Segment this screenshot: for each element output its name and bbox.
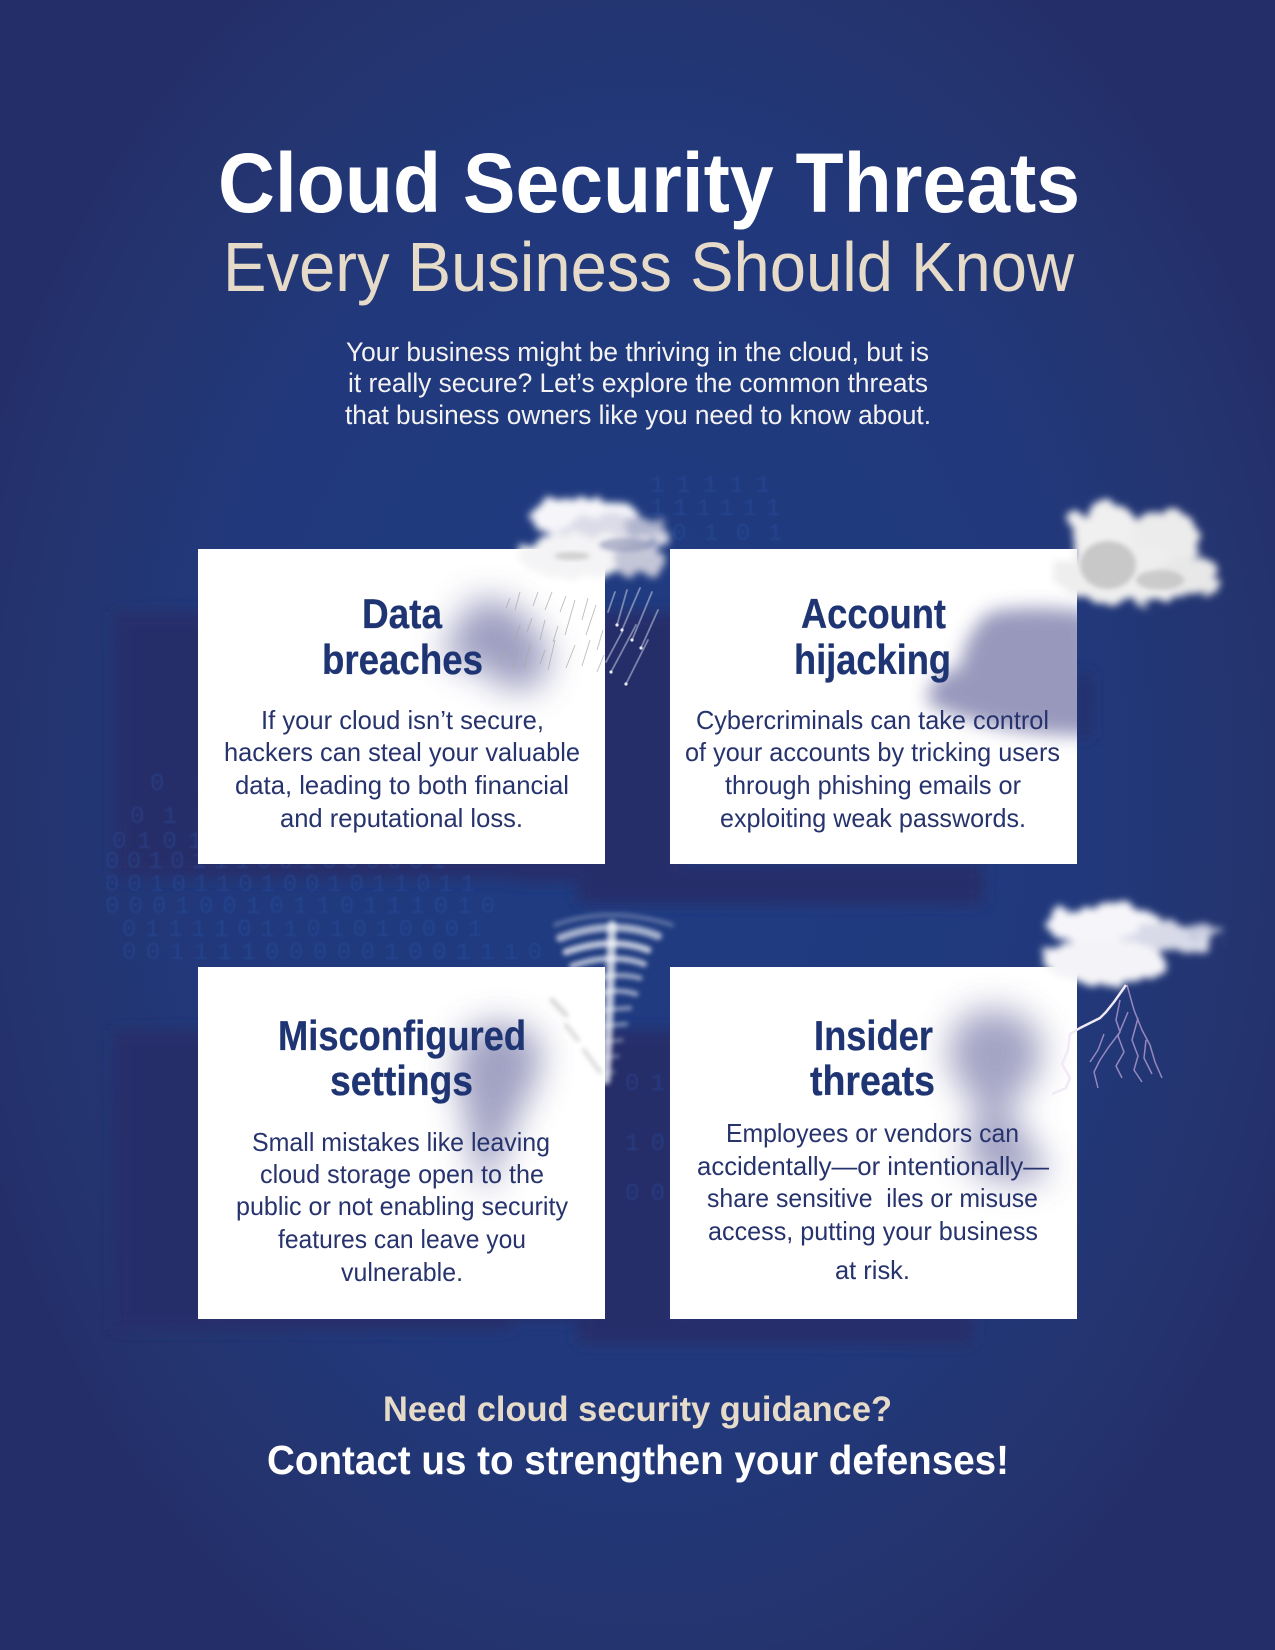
body — [685, 705, 1060, 833]
heading: Insider — [814, 1012, 933, 1059]
panel: data breaches — [198, 549, 605, 864]
binary digits background pattern: 0 1 — [625, 1071, 665, 1098]
body: at risk. — [835, 1255, 910, 1285]
intro text: that business owners like you need to know about. — [345, 400, 931, 430]
binary digits background pattern: 0 0 1 0 1 1 1 0 0 1 0 0 0 0 0 1 — [105, 849, 445, 876]
binary digits background pattern: 0 0 1 0 1 1 0 1 0 0 1 0 1 1 0 1 1 — [105, 872, 475, 899]
call to action — [267, 1390, 1009, 1483]
body: hackers can steal your valuable — [224, 737, 580, 767]
binary digits background pattern: 0 0 — [625, 1181, 665, 1208]
icon: storm cloud — [1045, 903, 1225, 984]
cloud shadow — [444, 600, 548, 689]
panel: misconfigured settings — [198, 967, 605, 1319]
body: If your cloud isn’t secure, — [261, 705, 544, 735]
heading: Data — [362, 590, 443, 637]
call to action: Need cloud security guidance? — [383, 1390, 892, 1429]
binary digits background pattern: 0 0 1 1 1 1 0 0 0 0 0 1 0 0 1 1 1 0 — [122, 940, 542, 967]
icon: grey cumulus cloud — [1053, 501, 1220, 603]
body: features can leave you — [278, 1224, 526, 1254]
body: Small mistakes like leaving — [252, 1127, 550, 1157]
icon: rain streaks on dark background — [606, 588, 658, 684]
intro text: it really secure? Let’s explore the common threats — [348, 368, 928, 398]
body: access, putting your business — [708, 1216, 1038, 1246]
binary digits background pattern: 0 0 0 1 0 0 1 0 1 1 0 1 1 1 0 1 0 — [105, 894, 495, 921]
panel: insider threats — [670, 967, 1077, 1319]
body — [224, 705, 580, 833]
body: data, leading to both financial — [235, 770, 569, 800]
binary digits background pattern: 0 1 0 1 — [672, 521, 782, 548]
binary digits background pattern: 1 0 — [625, 1131, 665, 1158]
body: exploiting weak passwords. — [720, 803, 1026, 833]
heading: Account — [801, 590, 946, 637]
body: Employees or vendors can — [726, 1118, 1019, 1148]
binary digits background pattern — [105, 473, 782, 1208]
intro text — [345, 337, 931, 430]
call to action: Contact us to strengthen your defenses! — [267, 1437, 1009, 1483]
body: through phishing emails or — [725, 770, 1021, 800]
panel: insider threats: threats — [810, 1057, 935, 1104]
rain on card — [500, 592, 604, 672]
body: accidentally—or intentionally— — [697, 1151, 1049, 1181]
binary digits background pattern: 0 1 — [150, 771, 210, 798]
body: vulnerable. — [341, 1257, 463, 1287]
title: Cloud Security Threats — [218, 136, 1080, 230]
panel: misconfigured settings: settings — [330, 1057, 473, 1104]
body: of your accounts by tricking users — [685, 737, 1060, 767]
subtitle: Every Business Should Know — [223, 228, 1074, 306]
heading: Misconfigured — [278, 1012, 526, 1059]
body: share sensitive iles or misuse — [707, 1183, 1038, 1213]
body: public or not enabling security — [236, 1191, 568, 1221]
body: cloud storage open to the — [260, 1159, 544, 1189]
intro text: Your business might be thriving in the cloud, but is — [346, 337, 929, 367]
binary digits background pattern: 1 1 1 1 1 1 — [650, 496, 780, 523]
binary digits background pattern: 0 1 1 — [130, 804, 210, 831]
icon: rain droplet tips — [609, 623, 643, 686]
icon: lightning bolts — [1052, 985, 1162, 1094]
body: and reputational loss. — [280, 803, 523, 833]
binary digits background pattern: 1 1 1 1 1 — [650, 473, 770, 500]
body — [697, 1118, 1049, 1285]
icon: tornado — [552, 915, 672, 1080]
body — [236, 1127, 568, 1287]
icon: rain cloud — [518, 498, 669, 577]
panel: data breaches: breaches — [322, 636, 483, 683]
panel: account hijacking — [670, 549, 1100, 864]
cloud shadow — [928, 608, 1100, 735]
binary digits background pattern: 0 1 1 1 1 0 1 1 0 1 0 1 0 0 0 1 — [122, 917, 482, 944]
storm shadow — [949, 1009, 1050, 1182]
tornado shadow — [456, 1023, 541, 1195]
body: Cybercriminals can take control — [696, 705, 1049, 735]
panel: account hijacking: hijacking — [794, 636, 951, 683]
binary digits background pattern: 0 1 0 1 — [112, 829, 202, 856]
